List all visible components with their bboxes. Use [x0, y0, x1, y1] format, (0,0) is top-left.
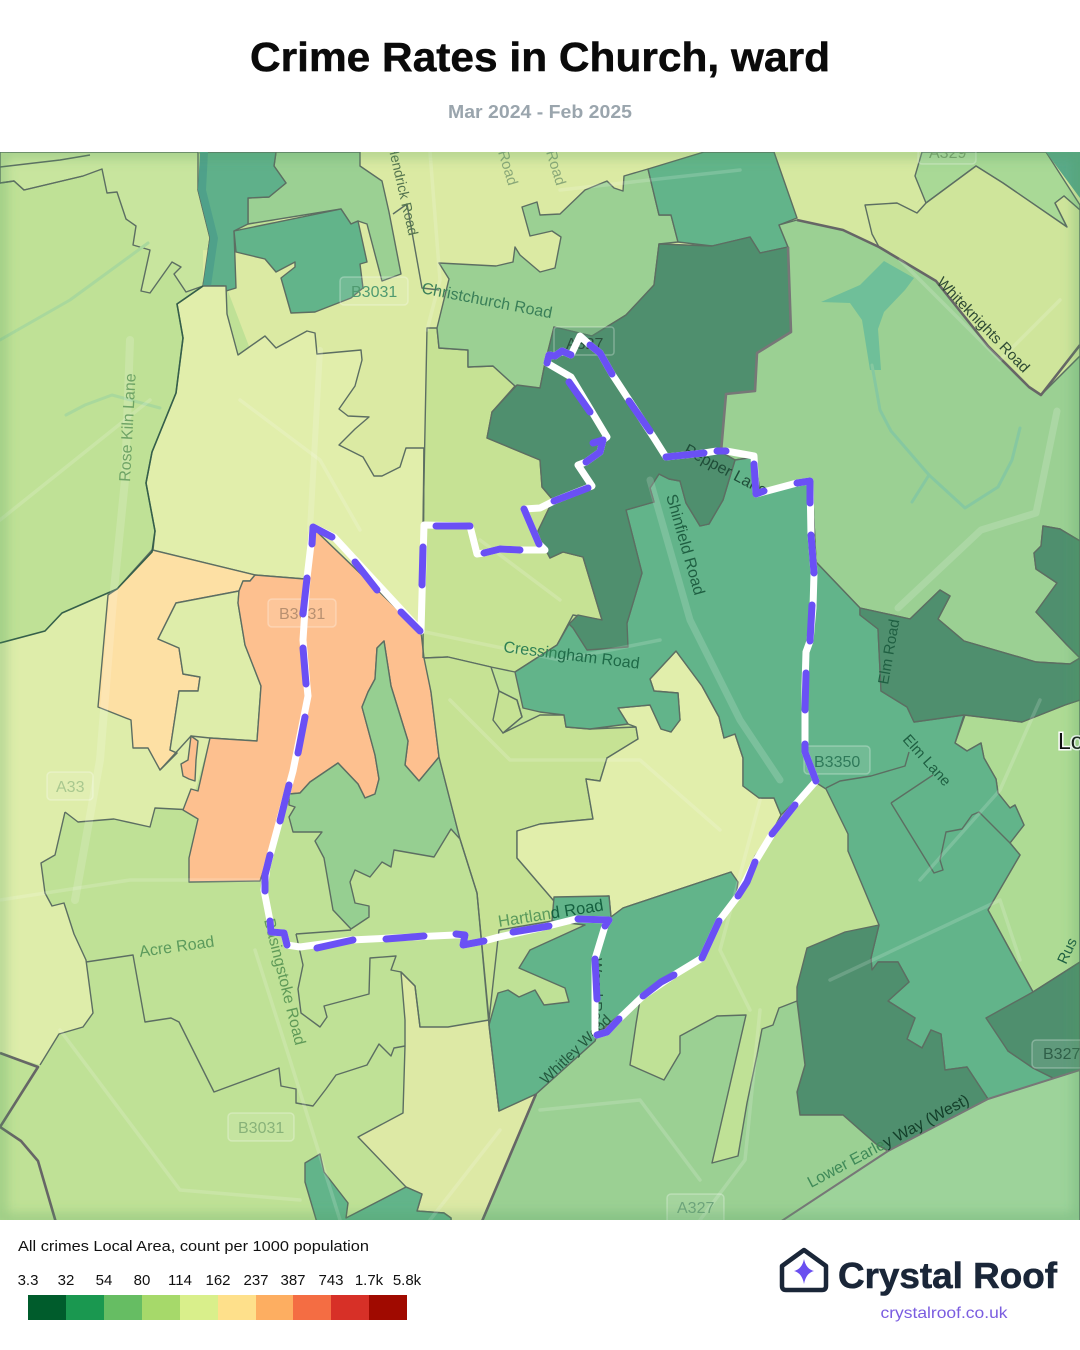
- road labels: B3031: [279, 606, 325, 623]
- ward boundary: [264, 336, 816, 1035]
- road labels: Pepper Lane: [681, 442, 770, 500]
- road labels: Cressingham Road: [503, 639, 641, 673]
- legend scale labels: [18, 1272, 422, 1289]
- road labels: Elm Road: [875, 618, 903, 686]
- road labels: A327: [677, 1200, 714, 1217]
- road labels: Whitley Wood: [537, 1012, 615, 1088]
- legend scale labels: 743: [318, 1272, 344, 1289]
- brand name: Crystal Roof: [838, 1255, 1058, 1296]
- legend scale labels: 54: [96, 1272, 112, 1289]
- legend scale labels: 80: [134, 1272, 150, 1289]
- brand logo: [782, 1250, 1058, 1322]
- subtitle: date range: Mar 2024 - Feb 2025: [448, 102, 632, 122]
- road labels: Acre Road: [138, 934, 215, 961]
- legend colour ramp: [28, 1295, 407, 1320]
- road labels: Wood Road: [588, 958, 605, 1037]
- road labels: A329: [929, 145, 966, 162]
- map edge vignette: [0, 152, 1080, 1220]
- road labels: Elm Lane: [899, 731, 954, 790]
- legend scale labels: 387: [280, 1272, 306, 1289]
- road labels: A327: [566, 336, 603, 353]
- road labels: B3031: [238, 1120, 284, 1137]
- road labels: Whiteknights Road: [933, 274, 1033, 376]
- road badges: [47, 140, 1080, 1224]
- road labels: Road: [494, 148, 521, 187]
- brand url: crystalroof.co.uk: [880, 1305, 1009, 1322]
- road labels: B327: [1043, 1046, 1080, 1063]
- legend title: All crimes Local Area, count per 1000 population: [18, 1238, 369, 1255]
- road labels: Christchurch Road: [420, 280, 554, 322]
- road network: [0, 152, 1060, 1220]
- road labels: Hartland Road: [497, 897, 605, 931]
- legend scale labels: 162: [205, 1272, 231, 1289]
- road labels: Rose Kiln Lane: [117, 373, 140, 482]
- legend scale labels: 1.7k: [355, 1272, 384, 1289]
- road labels: [56, 143, 1080, 1217]
- legend scale labels: 237: [243, 1272, 269, 1289]
- road labels: A33: [56, 779, 85, 796]
- legend scale labels: 32: [58, 1272, 74, 1289]
- legend scale labels: 3.3: [18, 1272, 38, 1289]
- road labels: Shinfield Road: [662, 492, 707, 597]
- icon: house with star: [782, 1250, 826, 1290]
- road labels: B3350: [814, 754, 860, 771]
- road labels: B3031: [351, 284, 397, 301]
- road labels: Road: [542, 148, 569, 187]
- legend scale labels: 114: [168, 1272, 192, 1289]
- map areas: crime rate regions: [0, 152, 1080, 1226]
- legend: [18, 1238, 422, 1320]
- title: Crime Rates in Church, ward: [250, 34, 830, 80]
- road labels: Basingstoke Road: [260, 917, 308, 1047]
- water streams: [0, 243, 1020, 508]
- legend scale labels: 5.8k: [393, 1272, 422, 1289]
- road labels: Hendrick Road: [385, 143, 421, 237]
- road labels: Lower Earley Way (West): [805, 1092, 972, 1192]
